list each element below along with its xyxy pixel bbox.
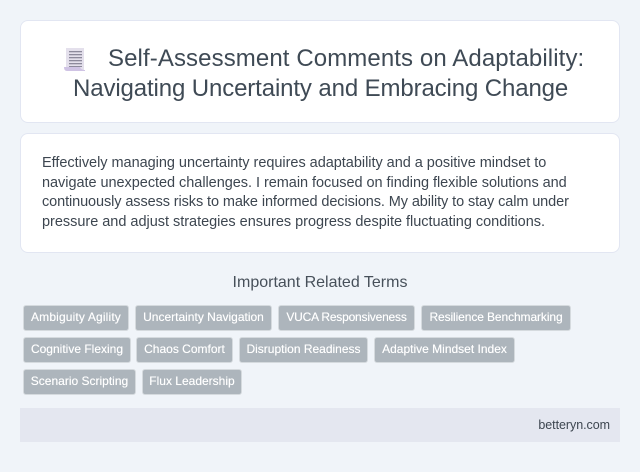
tag: Flux Leadership	[149, 374, 235, 388]
tag	[23, 337, 131, 363]
tag	[374, 337, 515, 363]
panel: title card	[20, 20, 620, 123]
tag: Resilience Benchmarking	[429, 310, 563, 324]
tag: Chaos Comfort	[144, 342, 225, 356]
title line 2: Navigating Uncertainty and Embracing Change	[73, 75, 568, 102]
tag	[142, 369, 242, 395]
footer bar	[20, 408, 620, 442]
title line 1: Self-Assessment Comments on Adaptability:	[108, 45, 584, 72]
icon: scroll document	[64, 48, 85, 71]
footer site name: betteryn.com	[538, 418, 610, 432]
description line 4: pressure and adjust strategies ensures progress despite fluctuating conditions.	[42, 214, 545, 230]
tag	[421, 305, 571, 331]
tag: Uncertainty Navigation	[143, 310, 264, 324]
description line 3: continuously assess risks to make informed decisions. My ability to stay calm under	[42, 194, 569, 210]
tag	[23, 369, 136, 395]
tag	[239, 337, 368, 363]
tag: Ambiguity Agility	[31, 310, 121, 324]
heading: important related terms: Important Related Terms	[233, 274, 407, 291]
description line 1: Effectively managing uncertainty requires adaptability and a positive mindset to	[42, 155, 546, 171]
tag: Scenario Scripting	[31, 374, 128, 388]
tag	[23, 305, 129, 331]
tag: Disruption Readiness	[246, 342, 361, 356]
tag	[135, 305, 272, 331]
tag: Cognitive Flexing	[31, 342, 123, 356]
description line 2: navigate unexpected challenges. I remain focused on finding flexible solutions and	[42, 175, 567, 191]
tag: Adaptive Mindset Index	[382, 342, 507, 356]
tag	[136, 337, 233, 363]
tag	[278, 305, 415, 331]
panel: description card	[20, 133, 620, 253]
tag: VUCA Responsiveness	[286, 310, 407, 324]
